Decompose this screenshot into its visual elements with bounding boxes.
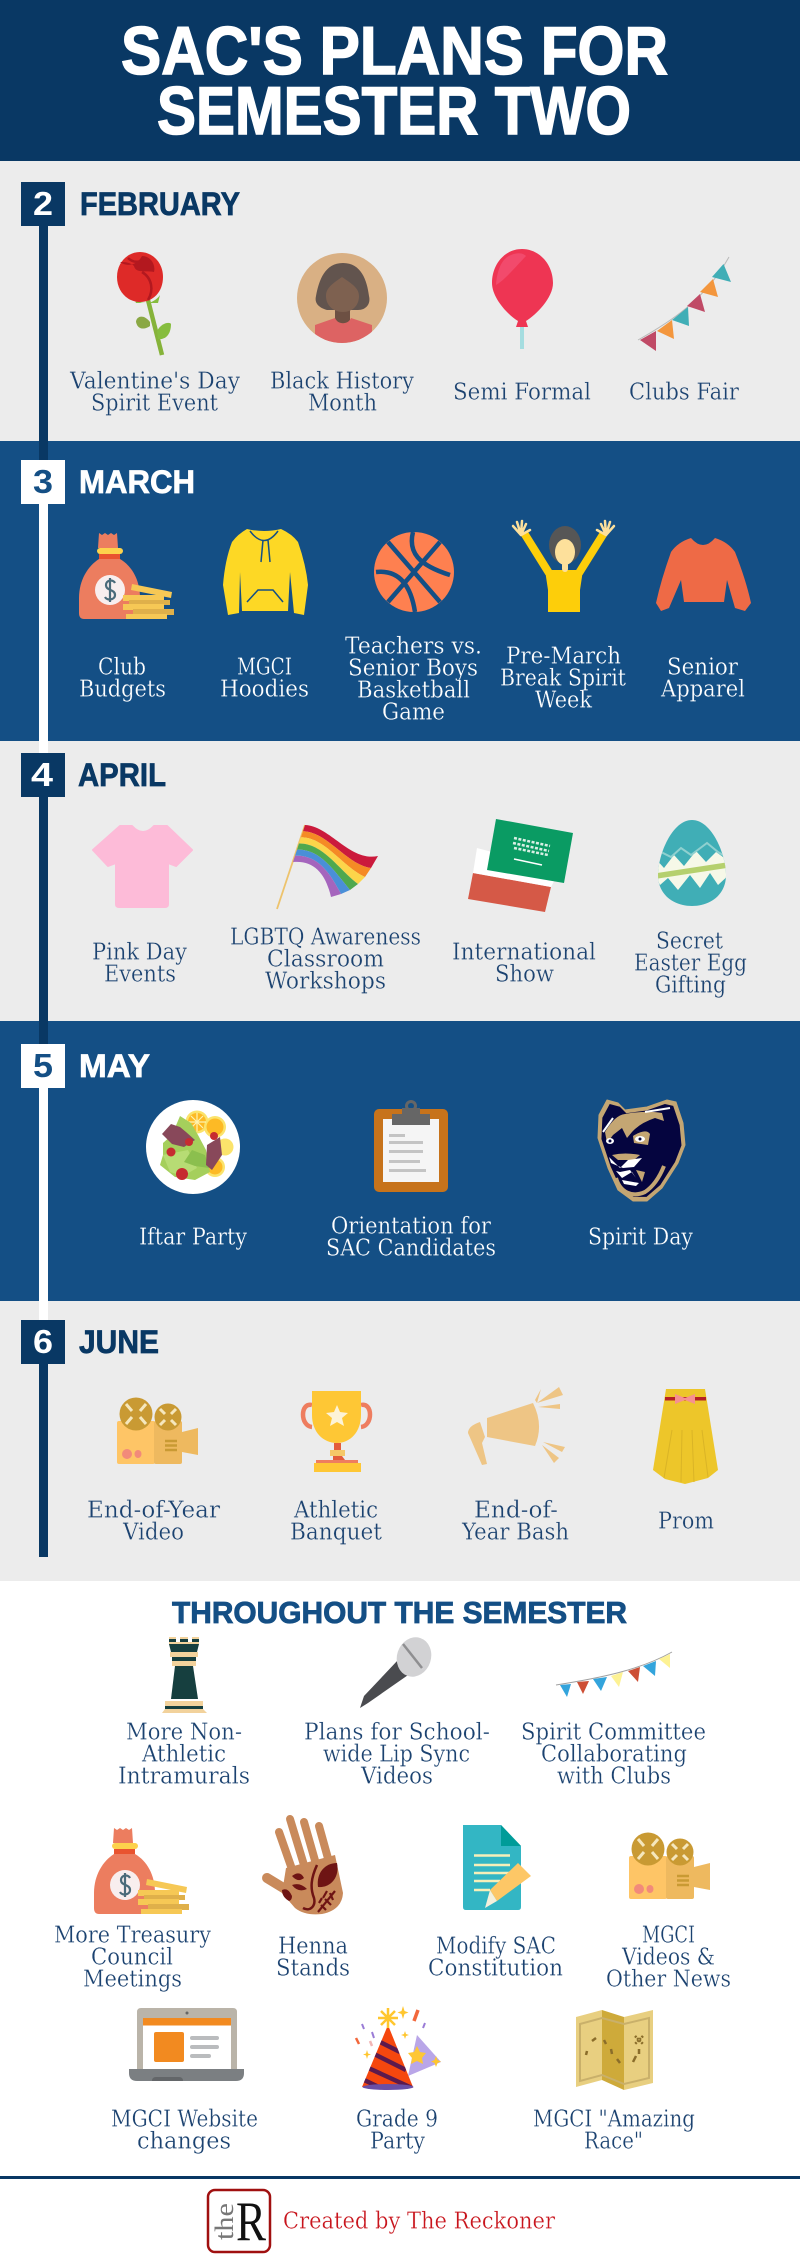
label: Senior Apparel: Senior [667,654,738,680]
label: Modify SAC Constitution [428,1934,563,1982]
label: Henna Stands: Henna [278,1934,348,1960]
icon: film projector [629,1832,710,1899]
label: Pre-March Break Spirit Week [500,644,627,714]
label: LGBTQ Awareness Classroom Workshops: Workshops [265,968,386,994]
label: More Non-Athletic Intramurals [118,1720,250,1790]
icon: party hats [356,2006,441,2090]
label: Prom: Prom [658,1508,714,1534]
label: MGCI Hoodies: MGCI [237,654,292,680]
timeline line [39,226,48,1557]
credit text: Created by The Reckoner [283,2208,555,2234]
label: LGBTQ Awareness Classroom Workshops: LGBTQ Awareness [230,924,421,950]
label: Spirit Committee Collaborating with Clubs: Spirit Committee [521,1720,706,1746]
label: Pink Day Events [92,940,187,988]
label: More Treasury Council Meetings: Council [91,1944,173,1970]
number badge: 4: 4 [31,756,54,793]
label: Secret Easter Egg Gifting: Secret [656,928,724,954]
label: Pre-March Break Spirit Week: Week [535,688,593,714]
number badge: 2: 2 [33,185,53,222]
label: Senior Apparel: Apparel [660,676,745,702]
label: Plans for School-wide Lip Sync Videos: Videos [360,1764,433,1790]
label: MGCI Hoodies [220,654,309,702]
icon: henna hand [267,1819,343,1914]
icon: easter egg [655,820,730,906]
title: SEMESTER TWO [157,73,631,149]
label: Club Budgets [79,654,166,702]
label: End-of-Year Video: Video [122,1520,184,1546]
logo: the Reckoner [208,2190,270,2253]
label: Pre-March Break Spirit Week: Pre-March [506,644,621,670]
logo: the Reckoner: R [236,2191,267,2253]
icon: money bag [94,1828,189,1914]
label: Orientation for SAC Candidates [326,1214,496,1262]
icon: money bag [79,533,174,619]
label: End-of-Year Bash [461,1498,569,1546]
label: Black History Month: Black History [270,368,414,394]
label: Modify SAC Constitution: Modify SAC [436,1934,556,1960]
icon: bunting [556,1652,672,1697]
label: LGBTQ Awareness Classroom Workshops: Classroom [267,946,384,972]
label: Athletic Banquet: Banquet [290,1520,383,1546]
panel: March [0,441,800,741]
label: Teachers vs. Senior Boys Basketball Game: Basketball [357,678,470,704]
icon: treasure map [576,2010,653,2090]
icon: basketball [374,532,454,612]
icon: laptop [129,2008,244,2081]
number badge: 5 [21,1044,65,1088]
label: Plans for School-wide Lip Sync Videos [304,1720,490,1790]
label: Teachers vs. Senior Boys Basketball Game: Game [382,700,445,726]
heading: March: MARCH [79,464,195,500]
icon: clipboard [374,1102,448,1192]
icon: prom skirt [653,1389,718,1484]
label: MGCI "Amazing Race": Race" [584,2128,643,2154]
label: Club Budgets: Club [98,654,146,680]
label: More Treasury Council Meetings: Meetings [83,1966,182,1992]
icon: portrait [297,253,387,350]
label: MGCI Videos & Other News: MGCI [642,1922,695,1948]
label: Secret Easter Egg Gifting [634,928,747,998]
label: More Treasury Council Meetings: More Treasury [54,1922,211,1948]
label: Modify SAC Constitution: Constitution [428,1956,563,1982]
label: Plans for School-wide Lip Sync Videos: Plans for School- [304,1720,490,1746]
label: Pink Day Events: Pink Day [92,940,187,966]
label: Spirit Committee Collaborating with Clubs [521,1720,706,1790]
heading: May: MAY [79,1048,150,1084]
label: Clubs Fair: Clubs Fair [629,380,739,406]
label: Orientation for SAC Candidates: SAC Candidates [326,1236,496,1262]
panel: February [0,161,800,441]
heading: Throughout the Semester: THROUGHOUT THE SEMESTER [172,1595,627,1630]
heading: February: FEBRUARY [80,186,240,222]
label: Secret Easter Egg Gifting: Gifting [655,972,726,998]
panel: June [0,1301,800,1581]
logo: the Reckoner: the [210,2203,239,2240]
icon: document and pencil [463,1825,531,1910]
icon: cougar mascot [598,1100,685,1201]
label: Grade 9 Party [356,2106,438,2154]
label: MGCI Website changes: changes [137,2128,231,2154]
label: MGCI Videos & Other News [606,1922,731,1992]
label: MGCI Website changes: MGCI Website [111,2106,258,2132]
icon: trophy [303,1391,370,1472]
label: Grade 9 Party: Grade 9 [356,2106,438,2132]
icon: rainbow flag [277,825,378,909]
number badge: 5: 5 [33,1047,53,1084]
label: Senior Apparel [660,654,745,702]
icon: iftar plate [146,1100,240,1194]
label: International Show: Show [495,962,554,988]
label: Pink Day Events: Events [104,962,176,988]
title [121,13,668,149]
icon: sweater [656,538,751,611]
panel: Throughout the Semester [55,1601,730,2154]
footer [0,2176,800,2253]
label: Spirit Committee Collaborating with Clubs: Collaborating [541,1742,687,1768]
label: More Non-Athletic Intramurals: Athletic [141,1742,226,1768]
icon: pink t-shirt [93,826,192,907]
label: Black History Month: Month [308,390,377,416]
label: International Show [452,940,596,988]
label: End-of-Year Video: End-of-Year [87,1498,220,1524]
label: MGCI Hoodies: Hoodies [220,676,309,702]
label: Plans for School-wide Lip Sync Videos: wide Lip Sync [323,1742,470,1768]
heading: June: JUNE [79,1324,159,1360]
label: Athletic Banquet [290,1498,383,1546]
icon: film projector [117,1398,198,1464]
label: Orientation for SAC Candidates: Orientation for [331,1214,491,1240]
label: Iftar Party: Iftar Party [139,1224,247,1250]
label: Athletic Banquet: Athletic [293,1498,378,1524]
label: Club Budgets: Budgets [79,676,166,702]
header banner [0,0,800,161]
label: Secret Easter Egg Gifting: Easter Egg [634,950,747,976]
label: More Non-Athletic Intramurals: More Non- [126,1720,242,1746]
label: Semi Formal: Semi Formal [453,380,591,406]
label: End-of-Year Bash: Year Bash [461,1520,569,1546]
number badge: 4 [21,753,65,797]
label: MGCI Videos & Other News: Other News [606,1966,731,1992]
label: MGCI Videos & Other News: Videos & [621,1944,715,1970]
label: Henna Stands [276,1934,350,1982]
label: Valentine's Day Spirit Event: Spirit Event [91,390,219,416]
icon: international flags [468,819,573,912]
label: Pre-March Break Spirit Week: Break Spirit [500,666,627,692]
label: Black History Month [270,368,414,416]
label: Spirit Committee Collaborating with Clubs: with Clubs [557,1764,671,1790]
label: Henna Stands: Stands [276,1956,350,1982]
icon: hoodie [223,529,308,615]
number badge: 6: 6 [33,1323,53,1360]
label: Grade 9 Party: Party [370,2128,425,2154]
number badge: 6 [21,1320,65,1364]
icon: megaphone [468,1387,565,1465]
panel: May [0,1021,800,1301]
label: MGCI "Amazing Race": MGCI "Amazing [533,2106,695,2132]
icon: cheering person [513,521,614,612]
icon: chess rook [162,1637,207,1713]
icon: balloon [492,249,553,349]
heading: April: APRIL [78,757,166,793]
label: End-of-Year Video [87,1498,220,1546]
number badge: 3: 3 [33,463,53,500]
label: Spirit Day: Spirit Day [588,1224,693,1250]
label: Valentine's Day Spirit Event [69,368,240,416]
label: More Non-Athletic Intramurals: Intramurals [118,1764,250,1790]
label: MGCI Website changes [111,2106,258,2154]
label: International Show: International [452,940,596,966]
icon: rose [117,252,171,355]
label: End-of-Year Bash: End-of- [474,1498,558,1524]
label: LGBTQ Awareness Classroom Workshops [230,924,421,994]
label: More Treasury Council Meetings [54,1922,211,1992]
title: SAC'S PLANS FOR [121,13,668,89]
panel: April [0,741,800,1021]
label: MGCI "Amazing Race" [533,2106,695,2154]
label: Teachers vs. Senior Boys Basketball Game: Teachers vs. [345,634,482,660]
number badge: 3 [21,460,65,504]
label: Teachers vs. Senior Boys Basketball Game [345,634,482,726]
icon: bunting [638,257,731,351]
number badge: 2 [21,182,65,226]
label: Valentine's Day Spirit Event: Valentine's Day [69,368,240,394]
label: Teachers vs. Senior Boys Basketball Game: Senior Boys [348,656,478,682]
icon: microphone [360,1633,436,1708]
